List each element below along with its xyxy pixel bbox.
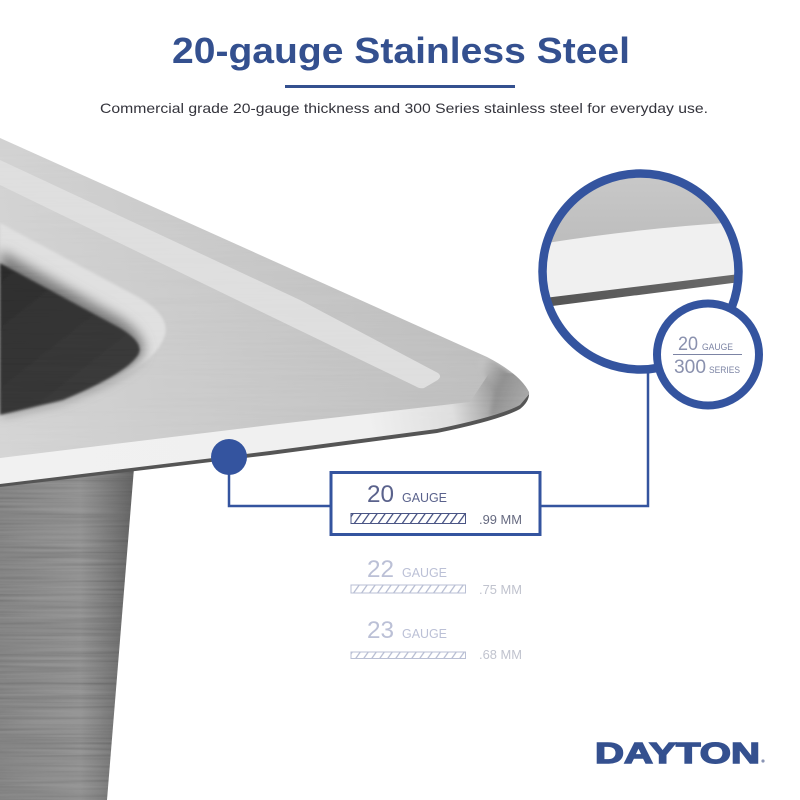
badge gauge text: 20 [678, 334, 698, 355]
brand logo: DAYTON [595, 738, 760, 770]
thickness value: .99 MM [479, 512, 522, 527]
thickness value: .68 MM [479, 647, 522, 662]
marker dot [211, 439, 247, 475]
badge ring [657, 304, 759, 406]
gauge comparison: 20 gauge highlighted: GAUGE [402, 490, 447, 505]
logo registered mark [761, 759, 765, 763]
sink photo [0, 130, 540, 800]
gauge label: 23 [367, 617, 394, 644]
gauge comparison: 22 gauge [351, 556, 522, 597]
callout connector: gauge box to badge [540, 372, 648, 506]
title: 20-gauge Stainless Steel [172, 30, 630, 71]
callout connector: dot to gauge box [229, 457, 331, 506]
steel thickness edge [0, 392, 531, 488]
raised channel strip [0, 160, 440, 388]
gauge comparison: 22 gauge: GAUGE [402, 565, 447, 580]
thickness bar [351, 514, 466, 524]
bowl shadow falloff [0, 250, 144, 415]
badge: 20 gauge 300 series [657, 304, 759, 406]
gauge box [331, 472, 540, 534]
front bright edge band [0, 372, 540, 490]
bowl rim highlight [0, 225, 166, 384]
zoom image [547, 178, 734, 306]
gauge label: 22 [367, 556, 394, 583]
thickness bar [351, 652, 466, 658]
badge series text: 300 [674, 357, 706, 378]
zoom circle: steel edge detail [540, 170, 740, 370]
gauge comparison: 23 gauge [351, 617, 522, 662]
sink deck [0, 130, 540, 490]
gauge comparison: 23 gauge: GAUGE [402, 626, 447, 641]
badge: 20 gauge 300 series: SERIES [709, 365, 740, 376]
brushed steel texture [0, 130, 540, 490]
thickness bar [351, 585, 466, 593]
gauge label: 20 [367, 481, 394, 508]
badge divider [673, 354, 742, 355]
zoom ring [542, 174, 738, 370]
sink bowl outer wall [0, 460, 140, 800]
gauge comparison: 20 gauge highlighted [331, 472, 540, 534]
title underline [285, 85, 515, 88]
badge: 20 gauge 300 series: GAUGE [702, 342, 733, 353]
bowl interior [0, 263, 140, 415]
subtitle: Commercial grade 20-gauge thickness and 300 Series stainless steel for everyday use. [100, 100, 708, 116]
thickness value: .75 MM [479, 582, 522, 597]
rounded corner shade [486, 362, 529, 415]
